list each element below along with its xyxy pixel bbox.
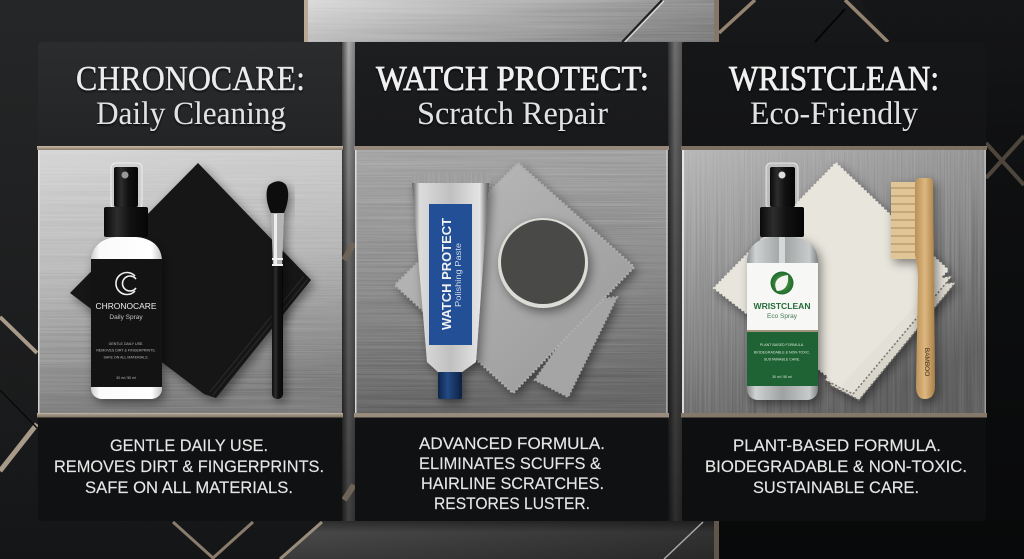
footer: ChronoCare description: REMOVES DIRT & FINGERPRINTS. <box>54 457 324 476</box>
footer: ChronoCare description <box>38 418 342 521</box>
gap between panels 2 and 3 <box>668 42 682 521</box>
icon: ChronoCare spray bottle: CHRONOCARE <box>96 301 157 311</box>
icon: bamboo brush: BAMBOO <box>923 348 930 376</box>
icon: WristClean spray bottle: WRISTCLEAN <box>754 301 810 311</box>
panel: Watch Protect <box>354 42 669 521</box>
tube label text: WATCH PROTECT <box>440 218 454 330</box>
heading: WristClean: WRISTCLEAN: <box>729 59 939 98</box>
header: ChronoCare <box>38 42 342 146</box>
footer: Watch Protect description: ADVANCED FORMULA. <box>419 434 605 453</box>
heading: Watch Protect: WATCH PROTECT: <box>376 59 649 98</box>
footer: ChronoCare description: GENTLE DAILY USE. <box>110 436 268 455</box>
panel: ChronoCare <box>37 42 343 521</box>
icon: WristClean spray bottle: 30 ml / 50 ml <box>772 375 792 379</box>
icon: WristClean spray bottle: BIODEGRADABLE & NON-TOXIC. <box>754 350 810 354</box>
heading: ChronoCare: CHRONOCARE: <box>76 59 305 98</box>
heading: WristClean: Eco-Friendly <box>750 96 918 132</box>
header: Watch Protect <box>355 42 668 146</box>
icon: polishing paste tube <box>412 173 490 399</box>
heading: ChronoCare <box>76 59 305 132</box>
heading: Watch Protect <box>376 59 649 132</box>
footer: Watch Protect description: ELIMINATES SCUFFS & <box>419 454 602 473</box>
footer: Watch Protect description <box>355 418 668 521</box>
icon: WristClean spray bottle: PLANT BASED FORMULA. <box>760 343 804 347</box>
icon: round polishing pad <box>498 218 588 308</box>
icon: ChronoCare spray bottle: SAFE ON ALL MATERIALS. <box>104 356 148 360</box>
logo: leaf <box>770 272 794 294</box>
tube label text <box>442 218 462 330</box>
icon: ChronoCare spray bottle <box>91 163 162 399</box>
heading: WristClean <box>729 59 939 132</box>
footer: WristClean description: BIODEGRADABLE & NON-TOXIC. <box>705 457 967 476</box>
gap between panels 1 and 2 <box>342 42 355 521</box>
panel: WristClean <box>681 42 987 521</box>
icon: ChronoCare spray bottle: GENTLE DAILY USE. <box>109 342 143 346</box>
icon: polishing cloth <box>395 163 634 397</box>
icon: bamboo brush <box>891 178 935 399</box>
footer: Watch Protect description: HAIRLINE SCRATCHES. <box>421 474 604 493</box>
logo: C mark <box>116 273 136 294</box>
icon: white cotton cloth <box>714 163 956 400</box>
header: WristClean <box>682 42 986 146</box>
product image: ChronoCare <box>38 150 342 414</box>
icon: makeup-style brush <box>267 181 288 399</box>
heading: ChronoCare: Daily Cleaning <box>96 96 286 132</box>
icon: ChronoCare spray bottle: 30 ml / 50 ml <box>116 376 136 380</box>
icon: WristClean spray bottle: Eco Spray <box>767 313 798 320</box>
tube label text: Polishing Paste <box>453 243 463 307</box>
product image: WristClean <box>682 150 986 414</box>
icon: black microfiber cloth <box>70 163 311 398</box>
icon: WristClean spray bottle: SUSTAINABLE CARE. <box>764 358 800 362</box>
footer: Watch Protect description: RESTORES LUSTER. <box>434 494 590 513</box>
product image: Watch Protect <box>355 150 668 414</box>
heading: Watch Protect: Scratch Repair <box>417 96 608 132</box>
icon: ChronoCare spray bottle: Daily Spray <box>109 314 143 321</box>
footer: WristClean description <box>682 418 986 521</box>
icon: ChronoCare spray bottle: REMOVES DIRT & FINGERPRINTS. <box>96 348 156 352</box>
footer: WristClean description: PLANT-BASED FORMULA. <box>733 436 941 455</box>
footer: ChronoCare description: SAFE ON ALL MATERIALS. <box>85 478 293 497</box>
icon: WristClean spray bottle <box>747 163 818 400</box>
footer: WristClean description: SUSTAINABLE CARE. <box>753 478 919 497</box>
